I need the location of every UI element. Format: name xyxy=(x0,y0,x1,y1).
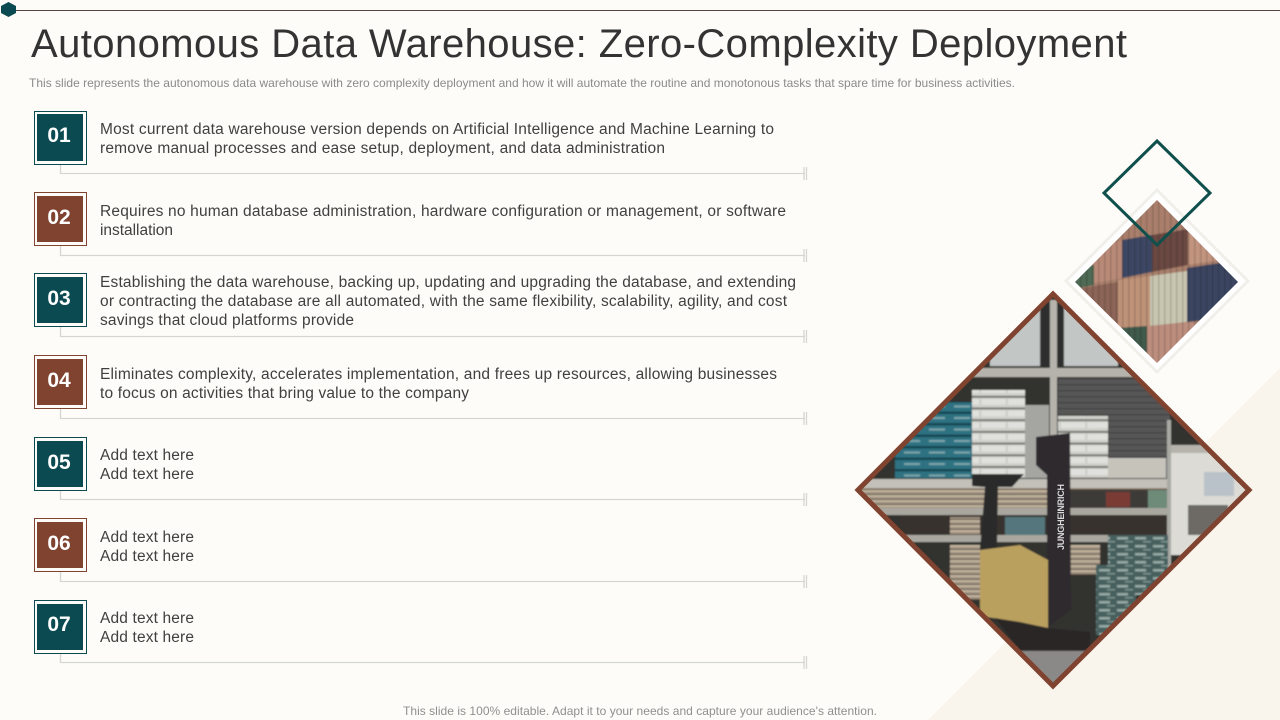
list item 05: Add text here xyxy=(100,447,194,464)
list item 06: 06 xyxy=(47,532,71,555)
photo: stacked shipping containers xyxy=(1066,190,1248,372)
floor xyxy=(1021,650,1086,682)
outlined green diamond xyxy=(1104,141,1210,245)
list item 02: Requires no human database administration, hardware configuration or management, or software xyxy=(100,203,786,220)
list item 05: 05 xyxy=(47,451,71,474)
list item 04: Eliminates complexity, accelerates implementation, and frees up resources, allowing businesses xyxy=(100,366,777,383)
list item 01: 01 xyxy=(47,124,71,147)
list item 06: Add text here xyxy=(100,529,194,546)
list item 03: savings that cloud platforms provide xyxy=(100,312,354,329)
right aisle xyxy=(1170,452,1246,556)
subtitle: This slide represents the autonomous data warehouse with zero complexity deployment and how it will automate the routine and monotonous tasks that spare time for business activities. xyxy=(29,76,1015,90)
list item 07 xyxy=(34,600,806,669)
list item 04 xyxy=(34,356,806,425)
forklift lettering: JUNGHEINRICH xyxy=(1056,484,1066,550)
white sack stacks xyxy=(972,390,1025,478)
list item 01 xyxy=(34,112,806,180)
list item 07: 07 xyxy=(47,613,71,636)
list item 03: Establishing the data warehouse, backing up, updating and upgrading the database, and extending xyxy=(100,274,796,291)
list item 04: to focus on activities that bring value to the company xyxy=(100,385,469,402)
roller shutter xyxy=(1058,378,1170,478)
list item 07: Add text here xyxy=(100,629,194,646)
list item 06: Add text here xyxy=(100,548,194,565)
forklift xyxy=(972,433,1090,650)
teal sack stacks xyxy=(895,402,972,478)
lower shelf goods xyxy=(860,488,1170,508)
upright post xyxy=(1050,300,1057,480)
upper pallets xyxy=(990,305,1118,366)
list item 05 xyxy=(34,438,806,506)
upper shelf beam xyxy=(970,368,1140,377)
main shelf beam xyxy=(860,479,1168,488)
list item 03 xyxy=(34,274,806,343)
list item 07: Add text here xyxy=(100,610,194,627)
list item 05: Add text here xyxy=(100,466,194,483)
list item 06 xyxy=(34,518,806,588)
list item 01: Most current data warehouse version depends on Artificial Intelligence and Machine Learning to xyxy=(100,121,774,138)
background corner triangle xyxy=(928,368,1280,720)
list item 04: 04 xyxy=(47,369,71,392)
list item 02 xyxy=(34,192,806,262)
photo: warehouse with forklift xyxy=(856,292,1252,688)
list item 02: installation xyxy=(100,222,173,239)
mottled sacks xyxy=(1108,535,1168,595)
title: Autonomous Data Warehouse: Zero-Complexity Deployment xyxy=(31,22,1127,66)
list item 02: 02 xyxy=(47,206,71,229)
header rule with hexagon marker xyxy=(1,2,1280,17)
footer note: This slide is 100% editable. Adapt it to your needs and capture your audience's attention. xyxy=(403,704,877,718)
list item 03: 03 xyxy=(47,287,71,310)
list item 01: remove manual processes and ease setup, deployment, and data administration xyxy=(100,140,665,157)
list item 03: or contracting the database are all automated, with the same flexibility, scalability, agility, and cost xyxy=(100,293,788,310)
